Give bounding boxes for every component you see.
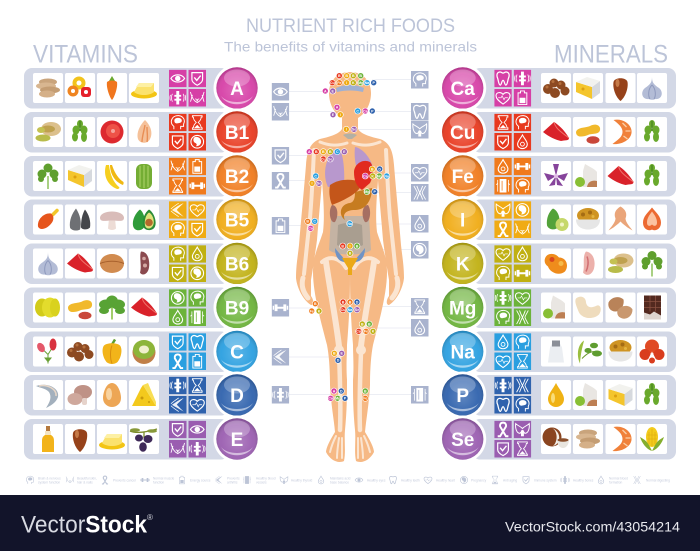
badge: C	[214, 328, 260, 375]
row: mineral Ca	[439, 64, 676, 112]
benefit icons: vitamin E	[169, 421, 206, 458]
benefit icons: Cu	[494, 114, 531, 150]
benefit icons: I	[494, 201, 531, 238]
row: vitamin B5	[24, 196, 260, 243]
dots: arthritis: B	[333, 352, 336, 356]
dots: muscle function: Fe	[310, 309, 314, 313]
hair band	[336, 85, 364, 92]
dots: brain: Cu	[330, 81, 335, 85]
row: mineral Fe	[439, 152, 676, 200]
dots: brain: K	[352, 81, 355, 85]
row: mineral Cu	[439, 108, 676, 156]
dots: cancer prevention: I	[312, 182, 313, 186]
badge: B6: B6	[225, 254, 249, 276]
dots: brain: I	[346, 81, 347, 85]
dots: thyroid	[343, 126, 357, 132]
dots: anti aging: D	[356, 300, 359, 304]
legend: Healthy heart	[436, 478, 455, 482]
foods: vitamin C	[33, 336, 159, 366]
dots: skin: E	[332, 113, 335, 117]
badge: B9	[214, 284, 260, 331]
badge: I: I	[460, 210, 465, 232]
badge: I	[439, 196, 486, 243]
dots: arthritis	[331, 350, 345, 363]
dots: thyroid: Se	[352, 128, 356, 132]
dots: heart: Ca	[363, 174, 369, 178]
row: mineral I	[439, 196, 676, 243]
watermark url: VectorStock.com/43054214	[505, 520, 681, 534]
dots: muscle function: B	[314, 302, 317, 306]
dots: heart: Na	[384, 174, 390, 178]
legend: Anti aging	[503, 478, 517, 482]
badge: Cu	[439, 108, 486, 156]
foods: Ca	[541, 73, 667, 103]
dots: bones: Ca	[328, 397, 334, 401]
dots: immune: Cu	[321, 157, 326, 161]
legend: Energy source	[190, 478, 211, 482]
legend: Prevents	[227, 476, 240, 480]
row: vitamin C	[24, 328, 260, 375]
dots: anti aging	[340, 299, 360, 313]
dots: muscle function	[309, 301, 322, 314]
foods: Cu	[541, 117, 667, 147]
legend: system function	[38, 480, 60, 484]
dots: heart: Mg	[377, 174, 382, 178]
heart	[354, 161, 373, 190]
badge: K	[439, 240, 486, 287]
dots: bones	[328, 388, 348, 401]
dots: arthritis: D	[337, 359, 340, 363]
row: mineral P	[439, 372, 676, 418]
intestines	[329, 216, 371, 254]
subtitle: The benefits of vitamins and minerals	[224, 38, 477, 54]
badge: E: E	[231, 430, 243, 451]
dots: muscle: Mg	[364, 190, 370, 194]
legend: Healthy blood	[256, 476, 276, 480]
dots: immune	[306, 149, 347, 162]
row: mineral Se	[439, 416, 676, 462]
dots: anti aging: B	[349, 300, 352, 304]
badge: P: P	[456, 386, 469, 407]
dots: pregnancy: B	[349, 252, 352, 256]
foods: vitamin B2	[33, 161, 159, 191]
badge: B1: B1	[225, 123, 250, 144]
row: vitamin B6	[24, 240, 260, 287]
foods: vitamin B1	[33, 117, 159, 147]
foods: vitamin B9	[33, 292, 159, 322]
grey callout icons, left	[272, 83, 289, 404]
foods: P	[541, 380, 667, 410]
dots: muscle: P	[373, 190, 376, 194]
dots: bones: Mg	[335, 397, 340, 401]
benefit icons: vitamin B9	[169, 289, 206, 326]
foods: vitamin E	[33, 424, 159, 454]
row: mineral K	[439, 240, 676, 287]
dots: teeth	[355, 108, 375, 114]
badge: A: A	[230, 79, 244, 100]
badge: Na	[439, 328, 486, 375]
badge: Mg	[439, 284, 486, 331]
panel: vitamins column	[24, 64, 260, 462]
badge: Cu: Cu	[450, 123, 475, 144]
benefit icons: vitamin B2	[169, 158, 206, 194]
badge: Ca: Ca	[451, 79, 475, 100]
dots: pregnancy: B	[341, 244, 344, 248]
foods: Mg	[541, 292, 667, 322]
legend: Pregnancy	[471, 478, 487, 482]
dots: eye: A	[324, 89, 327, 93]
watermark logo: VectorStock	[21, 512, 148, 538]
dots: teeth: Ca	[363, 109, 369, 113]
badge: Na: Na	[451, 342, 475, 364]
heading: vitamins: VITAMINS	[33, 40, 138, 68]
body: right half skin and skeleton	[350, 72, 404, 462]
benefit icons: P	[494, 377, 531, 414]
foods: I	[541, 204, 667, 234]
legend: Beautiful skin,	[77, 476, 97, 480]
dots: skin	[330, 104, 343, 118]
dots: muscle	[364, 189, 378, 195]
row: mineral Mg	[439, 284, 676, 331]
badge: D	[214, 372, 260, 418]
benefit icons: Fe	[494, 158, 531, 194]
benefit icons: Na	[494, 333, 531, 370]
dots: bones: P	[344, 397, 347, 401]
dots: brain: Fe	[337, 81, 341, 85]
benefit icons: vitamin B5	[169, 201, 206, 238]
dots: eye	[322, 88, 336, 94]
badge: Fe	[439, 152, 486, 200]
benefit icons: Ca	[494, 70, 531, 106]
dots: brain	[329, 73, 377, 86]
benefit icons: Mg	[494, 289, 531, 326]
badge: B6	[214, 240, 260, 287]
dots: skin: I	[340, 113, 341, 117]
legend: base balance	[330, 480, 349, 484]
dots: cancer prevention: C	[314, 174, 317, 178]
dots: immune: Se	[328, 157, 333, 161]
legend: Normal blood	[609, 476, 628, 480]
left lung	[325, 148, 344, 187]
uterus	[342, 258, 358, 275]
bronchi	[343, 134, 357, 139]
dots: brain: Na	[365, 81, 370, 85]
benefit icons: vitamin C	[169, 333, 206, 370]
dots: brain: B	[345, 74, 348, 78]
dots: immune: B	[322, 150, 325, 154]
benefit icons: vitamin B1	[169, 114, 206, 150]
dots: blood vessels	[362, 388, 368, 401]
dots: arthritis: E	[340, 352, 343, 356]
dots: energy	[305, 218, 318, 231]
foods: Fe	[541, 161, 667, 191]
dots: immune: B	[329, 150, 332, 154]
legend: Healthy teeth	[401, 478, 420, 482]
dots: blood: B	[361, 322, 364, 326]
badge: B9: B9	[225, 298, 249, 320]
legend: vessels	[256, 480, 267, 484]
badge: B5: B5	[225, 210, 250, 232]
dots: brain: B	[359, 74, 362, 78]
dots: energy: B	[306, 220, 309, 224]
dots: immune: A	[308, 150, 311, 154]
badge: A	[214, 64, 260, 112]
row: vitamin E	[24, 416, 260, 462]
dots: brain: P	[372, 81, 375, 85]
dots: cancer prevention: Se	[317, 182, 321, 186]
benefit icons: vitamin B6	[169, 245, 206, 282]
footer band	[0, 495, 700, 551]
dots: pregnancy	[340, 243, 360, 256]
dots: blood: Cu	[356, 330, 361, 334]
dots: heart: B	[371, 167, 374, 171]
benefit icons: Se	[494, 421, 531, 458]
panel: minerals column	[439, 64, 676, 462]
badge: Fe: Fe	[452, 167, 474, 188]
kidneys	[330, 205, 370, 222]
foods: vitamin D	[33, 380, 159, 410]
dots: teeth: C	[356, 109, 359, 113]
badge: B2: B2	[225, 167, 249, 188]
foods: vitamin B6	[33, 248, 159, 278]
legend: Prevents cancer	[113, 478, 137, 482]
legend: Maintains acid	[330, 476, 351, 480]
dots: immune: C	[336, 150, 339, 154]
badge: B5	[214, 196, 260, 243]
badge: Se	[439, 416, 486, 462]
badge: Mg: Mg	[449, 298, 476, 320]
legend: Healthy bones	[573, 478, 594, 482]
row: vitamin B9	[24, 284, 260, 331]
legend: arthritis	[227, 480, 238, 484]
badge: Ca	[439, 64, 486, 112]
row: vitamin D	[24, 372, 260, 418]
benefit icons: K	[494, 245, 531, 282]
badge: C: C	[230, 342, 244, 364]
dots: anti aging: Cu	[341, 308, 345, 312]
dots: thyroid: I	[346, 128, 347, 132]
dots: blood: K	[372, 330, 375, 334]
row: vitamin B2	[24, 152, 260, 200]
dots: skin: A	[336, 106, 339, 110]
badge: E	[214, 416, 260, 462]
dots: energy: C	[313, 220, 316, 224]
dots: pregnancy: I	[350, 244, 351, 248]
dots: blood vessels: Fe	[363, 397, 367, 401]
dots: heart: D	[378, 167, 381, 171]
dots: acid balance: Na	[347, 222, 353, 226]
dots: anti aging: B	[342, 300, 345, 304]
liver	[329, 180, 362, 205]
dots: heart	[362, 166, 390, 179]
badge: B1	[214, 108, 260, 156]
dots: blood: Fe	[364, 330, 368, 334]
badge: P	[439, 372, 486, 418]
dots: brain: B	[352, 74, 355, 78]
stomach	[341, 188, 372, 220]
dots: cancer prevention	[309, 173, 322, 186]
dots: pregnancy: B	[356, 244, 359, 248]
dots: anti aging: Na	[348, 308, 353, 312]
legend: hair & nails	[77, 480, 93, 484]
heading: minerals: MINERALS	[554, 40, 668, 68]
foods: Se	[541, 424, 667, 454]
grey callout icons, right	[411, 71, 428, 404]
dots: blood	[356, 321, 376, 334]
foods: K	[541, 248, 667, 278]
legend: Immune system	[534, 478, 557, 482]
registered mark: ®	[147, 513, 153, 522]
body: left half skin and skeleton	[296, 72, 350, 462]
foods: vitamin B5	[33, 204, 159, 234]
legend: formation	[609, 480, 623, 484]
dots: immune: B	[315, 150, 318, 154]
dots: heart: K	[371, 174, 374, 178]
dots: bones: A	[333, 389, 336, 393]
dots: anti aging: Se	[355, 308, 359, 312]
dots: energy: Ca	[308, 227, 314, 231]
title: NUTRIENT RICH FOODS	[246, 15, 455, 37]
row: vitamin A	[24, 64, 260, 112]
badge: Se: Se	[451, 430, 474, 451]
dots: acid balance	[347, 221, 353, 227]
benefit icons: vitamin A	[169, 70, 206, 106]
benefit icons: vitamin D	[169, 377, 206, 414]
badge: K: K	[456, 254, 470, 276]
row: mineral Na	[439, 328, 676, 375]
legend: Healthy eyes	[367, 478, 386, 482]
pelvis	[335, 248, 365, 262]
dots: brain: Mg	[358, 81, 363, 85]
dots: blood vessels: B	[364, 389, 367, 393]
foods: Na	[541, 336, 667, 366]
dots: eye: E	[331, 89, 334, 93]
connector lines	[289, 80, 411, 394]
body figure	[296, 72, 404, 462]
dots: muscle function: K	[318, 309, 321, 313]
badge: B2	[214, 152, 260, 200]
right lung	[355, 147, 374, 172]
dots: immune: E	[343, 150, 346, 154]
legend: Healthy thyroid	[291, 478, 312, 482]
dots: teeth: P	[371, 109, 374, 113]
legend: Normal digesting	[646, 478, 670, 482]
dots: bones: D	[340, 389, 343, 393]
dots: blood: B	[368, 322, 371, 326]
legend: Brain & nervous	[38, 476, 61, 480]
badge: D: D	[230, 386, 244, 407]
row: vitamin B1	[24, 108, 260, 156]
foods: vitamin A	[33, 73, 159, 103]
legend	[25, 475, 670, 485]
dots: brain: B	[338, 74, 341, 78]
legend: Normal muscle	[153, 476, 174, 480]
legend: function	[153, 480, 164, 484]
